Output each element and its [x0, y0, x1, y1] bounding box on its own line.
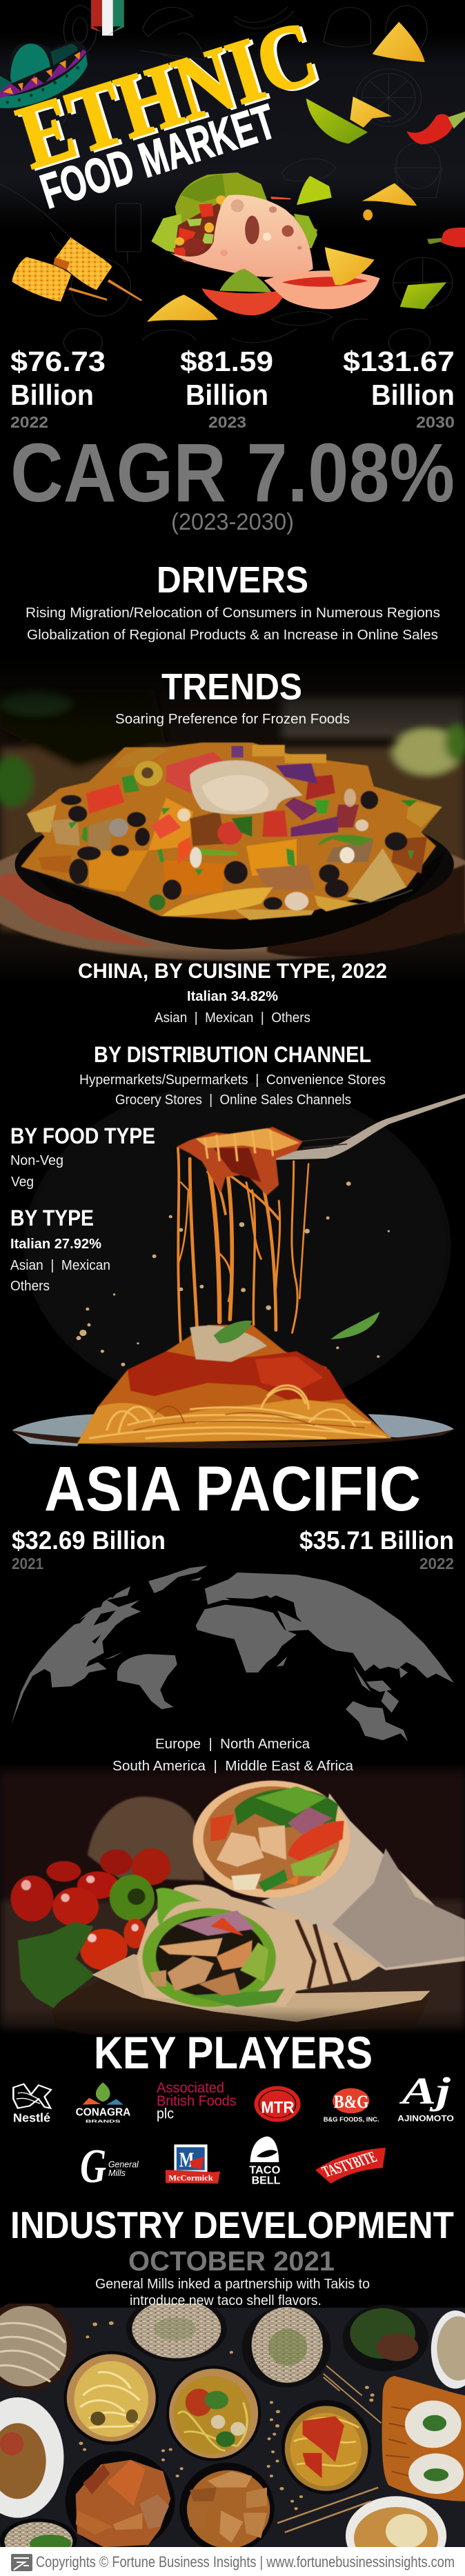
heading: key players: KEY PLAYERS: [94, 2027, 373, 2078]
heading: asia pacific: ASIA PACIFIC: [44, 1454, 421, 1524]
wooden board: [0, 823, 465, 961]
logo: nestle: Nestlé: [13, 2111, 50, 2125]
europe north america: Europe | North America: [155, 1736, 310, 1752]
icon: salsa bowl with chip: [264, 247, 379, 309]
development line 1: General Mills inked a partnership with Takis to: [95, 2276, 370, 2292]
panel: industry development: [10, 2204, 454, 2308]
icon: taco with salsa: [151, 172, 317, 277]
logo: conagra: CONAGRA: [76, 2106, 130, 2118]
upper wrap: [183, 1773, 465, 1970]
logo: ajinomoto: AJINOMOTO: [397, 2113, 454, 2123]
stat: 2022: 2022: [10, 413, 48, 431]
parmesan flecks: [77, 1181, 390, 1366]
logo: nestle: [13, 2084, 51, 2125]
logo: conagra: [76, 2082, 130, 2124]
driver 1: Rising Migration/Relocation of Consumers in Numerous Regions: [26, 605, 440, 621]
paper: [92, 1954, 431, 2022]
logo: mtr: [255, 2086, 301, 2122]
footer bar: [0, 2547, 465, 2576]
logo: mccormick: [166, 2144, 220, 2184]
panel: trends: [115, 666, 350, 727]
bowl top left noodles: [0, 2299, 75, 2391]
logo: general mills: General: [108, 2159, 139, 2170]
dark band background: [0, 32, 465, 230]
chopsticks: [277, 2366, 382, 2533]
white bowl bottom right: [345, 2496, 447, 2547]
panel: market size stats: [10, 346, 455, 535]
channels line 1: Hypermarkets/Supermarkets | Convenience Stores: [79, 1072, 386, 1088]
logo: ajinomoto: Aj: [399, 2070, 451, 2112]
pasta heap: [77, 1325, 392, 1444]
logo: associated british foods: [157, 2079, 237, 2122]
logo: tasty bite: TASTYBITE: [319, 2148, 379, 2180]
bowl white right: [431, 2310, 465, 2388]
lower wrap: [137, 1885, 379, 2007]
nachos pile: [21, 743, 442, 920]
title: food market: FOOD MARKET: [34, 94, 281, 219]
panel: food bowls photo: [0, 2304, 465, 2547]
italian type share: Italian 27.92%: [10, 1236, 101, 1252]
heading: food type: BY FOOD TYPE: [10, 1124, 155, 1148]
logo: general mills: G: [80, 2139, 106, 2193]
icon: chips, limes and chillies: [147, 22, 465, 322]
logo: ajinomoto: [397, 2070, 454, 2123]
panel: distribution channel: [79, 1042, 386, 1108]
stat: 2022: 2022: [419, 1555, 454, 1572]
basil leaf falling: [330, 1312, 379, 1339]
stat: 2022: $76.73: [10, 346, 106, 377]
peppers and toppings: [253, 745, 326, 763]
logo: taco bell: [249, 2137, 281, 2186]
logo: conagra: BRANDS: [86, 2119, 121, 2124]
blurred backdrop: [0, 690, 465, 931]
panel: header illustration: [0, 0, 465, 357]
logo: associated british foods: British Foods: [157, 2093, 237, 2109]
plate white left: [0, 2397, 63, 2518]
beans: [61, 791, 407, 910]
photo fade top: [0, 655, 465, 731]
company logos: [13, 2070, 454, 2193]
driver 2: Globalization of Regional Products & an Increase in Online Sales: [27, 627, 438, 643]
panel: asia pacific: [11, 1454, 454, 1741]
panel: drivers: [26, 559, 440, 643]
noodles on fork: [177, 1127, 303, 1195]
panel: china by cuisine type: [78, 959, 387, 1026]
plate: [12, 1414, 454, 1448]
panel: key players: [13, 2027, 454, 2193]
south america middle east africa: South America | Middle East & Africa: [112, 1758, 354, 1774]
stat: 2022: [299, 1526, 454, 1572]
heading: drivers: DRIVERS: [157, 559, 308, 601]
bottom fade: [0, 2007, 465, 2048]
bowl bottom left: [0, 2519, 77, 2547]
bowl rice right: [241, 2307, 330, 2388]
trend item: Soaring Preference for Frozen Foods: [115, 711, 350, 727]
panel: by food type: [10, 1124, 155, 1190]
world globe: [11, 1566, 454, 1741]
wooden tray: [382, 2376, 465, 2502]
stat: 2030: $131.67: [343, 346, 455, 377]
cagr period: (2023-2030): [171, 509, 294, 535]
backdrop: [0, 1759, 465, 2048]
stat: 2021: [12, 1526, 166, 1572]
lettuce: [18, 1922, 95, 2008]
heading: distribution: BY DISTRIBUTION CHANNEL: [94, 1042, 371, 1067]
channels line 2: Grocery Stores | Online Sales Channels: [115, 1092, 351, 1108]
fork: [273, 1094, 465, 1160]
heading: by type: BY TYPE: [10, 1206, 94, 1230]
bowl greens: [343, 2305, 428, 2371]
stat: 2023: [180, 346, 273, 431]
heading: trends: TRENDS: [161, 666, 302, 708]
logo: b&g foods: B&G FOODS, INC.: [324, 2116, 379, 2124]
burlap sack: [88, 1797, 205, 1881]
logo: associated british foods: Associated: [157, 2079, 224, 2096]
bowl orange noodles: [166, 2366, 261, 2462]
stat: 2030: Billion: [371, 379, 455, 411]
bowl top rice: [126, 2304, 227, 2362]
photo fade bottom: [0, 948, 465, 983]
icon: italy ribbon flag: [91, 0, 124, 36]
non-veg: Non-Veg: [10, 1152, 63, 1168]
doodle pattern: [0, 6, 453, 357]
icon: guacamole bowl: [201, 269, 286, 315]
onion: [276, 763, 317, 784]
asian mexican: Asian | Mexican: [10, 1257, 110, 1273]
logo: b&g foods: [324, 2088, 379, 2124]
stat: 2023: 2023: [208, 413, 246, 431]
logo: mtr: MTR: [261, 2098, 295, 2117]
stat: 2022: Billion: [10, 379, 94, 411]
stat: 2030: [343, 346, 455, 431]
spaghetti strands: [178, 1148, 308, 1348]
logo: general mills: Mills: [108, 2168, 126, 2178]
panel: wrap photo: [0, 1759, 465, 2048]
veg: Veg: [11, 1174, 34, 1190]
icon: sombrero: [0, 41, 88, 110]
stat: 2022: $35.71 Billion: [299, 1526, 454, 1555]
other cuisines: Asian | Mexican | Others: [155, 1010, 310, 1026]
logo: taco bell: TACO: [249, 2164, 281, 2176]
date: OCTOBER 2021: [128, 2246, 335, 2277]
logo: associated british foods: plc: [157, 2106, 174, 2122]
chips in front: [161, 888, 273, 916]
logo: mccormick: M: [179, 2148, 194, 2172]
panel: by type: [10, 1206, 110, 1294]
stat: 2023: Billion: [186, 379, 268, 411]
skillet: [15, 803, 454, 926]
tomato pieces: [166, 752, 226, 793]
napkin: [0, 874, 155, 946]
stat: 2021: $32.69 Billion: [12, 1526, 166, 1555]
bowl noodles red peppers: [281, 2400, 371, 2495]
bowl fried chicken: [66, 2451, 175, 2551]
bowl chicken pieces: [179, 2463, 275, 2554]
bowl yellow noodles: [63, 2350, 159, 2445]
stat: 2030: 2030: [416, 413, 455, 431]
basil on top: [214, 1321, 253, 1344]
tomatoes: [10, 1848, 170, 1970]
others: Others: [10, 1278, 50, 1294]
stat: 2022: [10, 346, 106, 431]
heading: china cuisine: CHINA, BY CUISINE TYPE, 2022: [78, 959, 387, 983]
stat: 2023: $81.59: [180, 346, 273, 377]
italian share: Italian 34.82%: [187, 988, 278, 1004]
wooden board: [52, 1979, 431, 2035]
icon: fortune business insights logo: [11, 2554, 32, 2571]
dark backdrop: [0, 1035, 465, 1448]
sour cream: [190, 760, 303, 815]
logo: taco bell: BELL: [252, 2175, 281, 2186]
scattered grains: [79, 2322, 375, 2510]
development line 2: introduce new taco shell flavors.: [130, 2293, 321, 2308]
panel: nachos photo: [0, 655, 465, 981]
logo: b&g foods: B&G: [334, 2092, 369, 2112]
panel: spaghetti photo: [0, 1035, 465, 1448]
logo: tasty bite: [315, 2148, 386, 2184]
stat: 2021: 2021: [12, 1555, 43, 1572]
icon: corn cobs: [12, 237, 142, 301]
logo: mccormick: McCormick: [168, 2173, 213, 2182]
